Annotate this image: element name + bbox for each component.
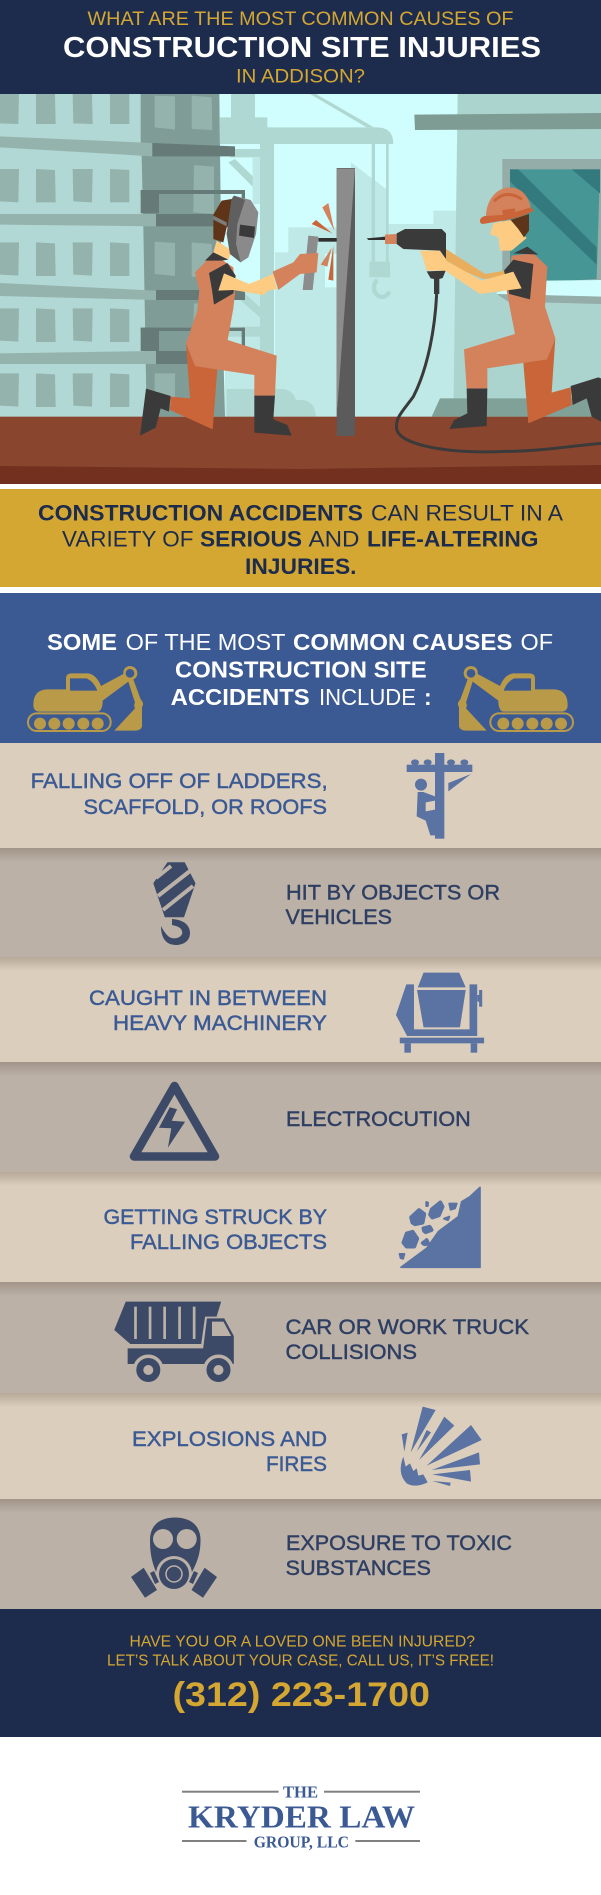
icon: gas mask <box>131 1518 217 1598</box>
statement text: CAN RESULT IN A <box>371 501 563 526</box>
text: hit by objects or vehicles <box>286 882 500 929</box>
text: caught in between heavy machinery: CAUGHT IN BETWEEN <box>89 987 327 1010</box>
subheading text: CONSTRUCTION SITE <box>175 657 427 683</box>
panel: explosions and fires <box>0 1393 601 1499</box>
statement text <box>38 501 563 579</box>
panel: truck collisions <box>0 1282 601 1393</box>
icon: crane hook <box>153 862 196 945</box>
steel pillar <box>337 168 355 436</box>
subheading text: OF THE MOST <box>126 629 286 655</box>
right worker drilling <box>367 187 601 452</box>
panel: electrocution <box>0 1062 601 1172</box>
illustration: two construction workers welding and drilling <box>0 94 601 484</box>
text: car or work truck collisions: COLLISIONS <box>286 1341 417 1364</box>
text: caught in between heavy machinery: HEAVY MACHINERY <box>113 1012 327 1035</box>
panel: struck by falling objects <box>0 1172 601 1282</box>
text: getting struck by falling objects: FALLING OBJECTS <box>130 1231 327 1254</box>
text: car or work truck collisions: CAR OR WORK TRUCK <box>286 1316 529 1339</box>
icon: high voltage warning <box>134 1086 215 1156</box>
text: exposure to toxic substances: EXPOSURE TO TOXIC <box>286 1532 512 1555</box>
panel: caught in machinery <box>0 957 601 1062</box>
text: explosions and fires: EXPLOSIONS AND <box>132 1428 327 1451</box>
logo: the kryder law group <box>182 1783 420 1852</box>
sparks <box>312 203 334 281</box>
right building <box>414 94 601 417</box>
text: car or work truck collisions <box>286 1316 529 1364</box>
title: construction site injuries: CONSTRUCTION SITE INJURIES <box>63 32 541 64</box>
statement text: VARIETY OF <box>62 527 194 552</box>
subheading text: : <box>424 684 432 710</box>
text: hit by objects or vehicles: VEHICLES <box>286 906 392 929</box>
call to action text: LET’S TALK ABOUT YOUR CASE, CALL US, IT’S FREE! <box>107 1653 494 1670</box>
subheading text <box>47 629 553 710</box>
text: exposure to toxic substances: SUBSTANCES <box>286 1557 431 1580</box>
statement text: AND <box>308 527 360 552</box>
text: getting struck by falling objects: GETTING STRUCK BY <box>104 1206 327 1229</box>
crane background <box>220 94 457 427</box>
icon: dump truck <box>114 1302 234 1386</box>
panel: call to action <box>0 1609 601 1737</box>
text: falling off of ladders: FALLING OFF OF LADDERS, <box>31 770 328 793</box>
subheading text: ACCIDENTS <box>171 684 310 710</box>
call to action text: HAVE YOU OR A LOVED ONE BEEN INJURED? <box>130 1634 475 1651</box>
heading line: what are the most common causes of: WHAT ARE THE MOST COMMON CAUSES OF <box>88 8 514 30</box>
left worker welding <box>140 196 337 436</box>
statement text: CONSTRUCTION ACCIDENTS <box>38 501 363 526</box>
panel: header <box>0 0 601 94</box>
text: falling off of ladders: SCAFFOLD, OR ROOFS <box>84 796 327 819</box>
panel: gold statement <box>0 489 601 587</box>
icon: excavator left <box>28 666 143 731</box>
icon: explosion <box>401 1407 482 1486</box>
logo: the kryder law group: THE <box>283 1783 318 1802</box>
statement text: SERIOUS <box>200 527 302 552</box>
call to action text <box>107 1634 494 1670</box>
subheading text: INCLUDE <box>319 684 416 710</box>
icon: excavator right <box>458 666 573 731</box>
icon: cement mixer <box>396 973 484 1053</box>
phone number: (312) 223-1700 <box>172 1676 430 1714</box>
subheading text: SOME <box>47 629 117 655</box>
logo: the kryder law group: KRYDER LAW <box>188 1798 415 1834</box>
panel: falling off ladders <box>0 743 601 848</box>
text: exposure to toxic substances <box>286 1532 512 1580</box>
panel: blue subheading <box>0 593 601 743</box>
logo: the kryder law group: GROUP, LLC <box>254 1833 349 1852</box>
left building with windows and scaffold <box>0 94 245 417</box>
icon: falling rocks <box>400 1187 480 1267</box>
text: explosions and fires: FIRES <box>266 1453 327 1476</box>
ground <box>0 417 601 484</box>
text: getting struck by falling objects <box>104 1206 327 1254</box>
panel: toxic substances <box>0 1499 601 1609</box>
subheading text: OF <box>520 629 553 655</box>
text: explosions and fires <box>132 1428 327 1476</box>
heading line: in addison: IN ADDISON? <box>236 66 365 88</box>
text: electrocution: ELECTROCUTION <box>286 1108 471 1131</box>
statement text: INJURIES. <box>245 554 356 579</box>
panel: hit by objects <box>0 848 601 957</box>
text: hit by objects or vehicles: HIT BY OBJECTS OR <box>286 882 500 904</box>
text: caught in between heavy machinery <box>89 987 327 1035</box>
text: falling off of ladders <box>31 770 328 819</box>
subheading text: COMMON CAUSES <box>293 629 512 655</box>
icon: worker climbing pole <box>407 753 472 839</box>
statement text: LIFE-ALTERING <box>367 527 538 552</box>
